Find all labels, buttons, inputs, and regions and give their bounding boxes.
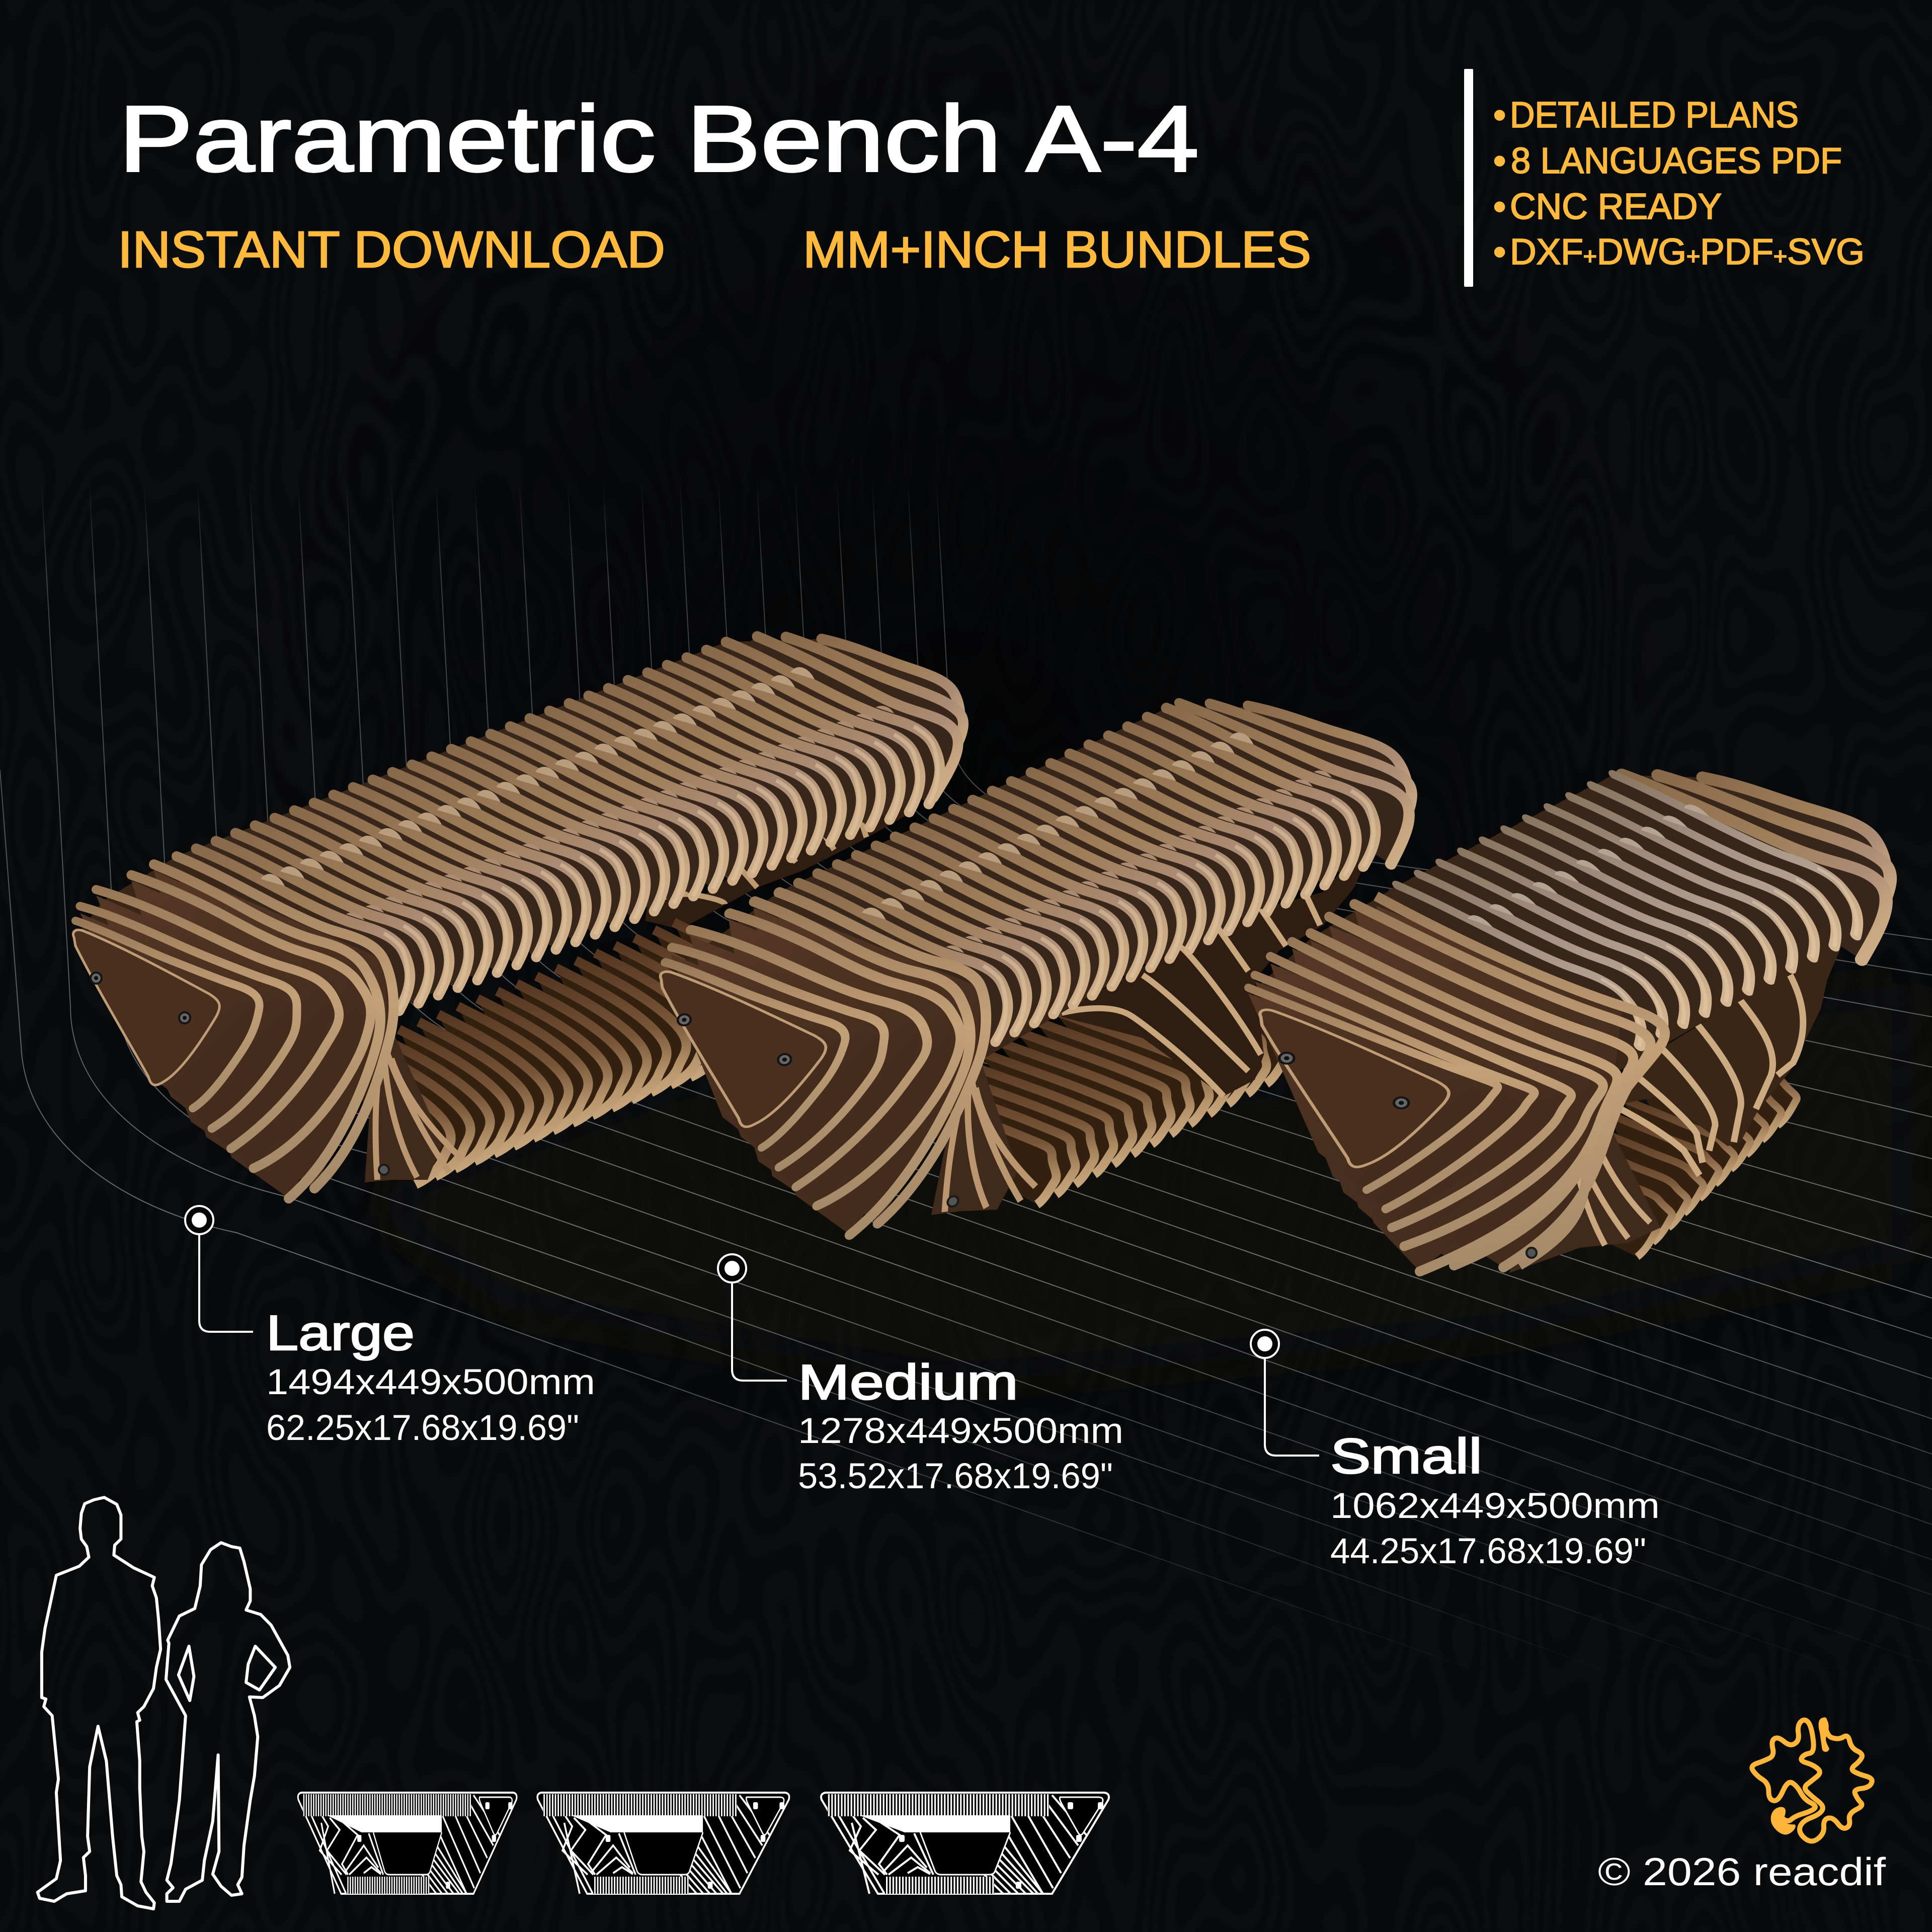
feature list: • (1493, 187, 1506, 227)
subtitle: bundles: MM+INCH BUNDLES (803, 221, 1311, 278)
feature list (1493, 95, 1865, 272)
callout: small (1251, 1330, 1660, 1571)
divider bar (1464, 69, 1473, 287)
human silhouettes (38, 1497, 290, 1909)
large bench (73, 636, 963, 1198)
feature list: • (1493, 141, 1506, 181)
feature list: 8 LANGUAGES PDF (1511, 141, 1842, 181)
callout: large: 62.25x17.68x19.69" (266, 1408, 579, 1448)
callout: large: Large (266, 1305, 415, 1360)
callout: small: 1062x449x500mm (1330, 1486, 1660, 1526)
callout: small: Small (1330, 1428, 1482, 1484)
callout: small: 44.25x17.68x19.69" (1330, 1532, 1646, 1571)
side elevation: small (821, 1793, 1109, 1894)
callout: medium (718, 1254, 1123, 1496)
feature list: DXF+DWG+PDF+SVG (1510, 232, 1865, 272)
callout: large: 1494x449x500mm (266, 1362, 595, 1402)
callout: medium: Medium (798, 1354, 1018, 1410)
callout: medium: 1278x449x500mm (798, 1411, 1123, 1451)
side elevation: medium (537, 1793, 789, 1894)
medium bench (628, 703, 1422, 1244)
callout: medium: 53.52x17.68x19.69" (798, 1457, 1113, 1496)
copyright: © 2026 reacdif (1598, 1849, 1886, 1894)
subtitle: instant download: INSTANT DOWNLOAD (118, 221, 665, 278)
feature list: DETAILED PLANS (1510, 95, 1799, 135)
small bench (1247, 773, 1899, 1273)
floor and wall sweep lines (0, 495, 1932, 1647)
feature list: • (1493, 95, 1506, 135)
feature list: CNC READY (1510, 187, 1722, 227)
title: Parametric Bench A-4 (119, 87, 1199, 191)
side elevation: large (298, 1793, 517, 1894)
feature list: • (1493, 232, 1506, 272)
logo (1752, 1718, 1872, 1841)
callout: large (185, 1206, 595, 1448)
